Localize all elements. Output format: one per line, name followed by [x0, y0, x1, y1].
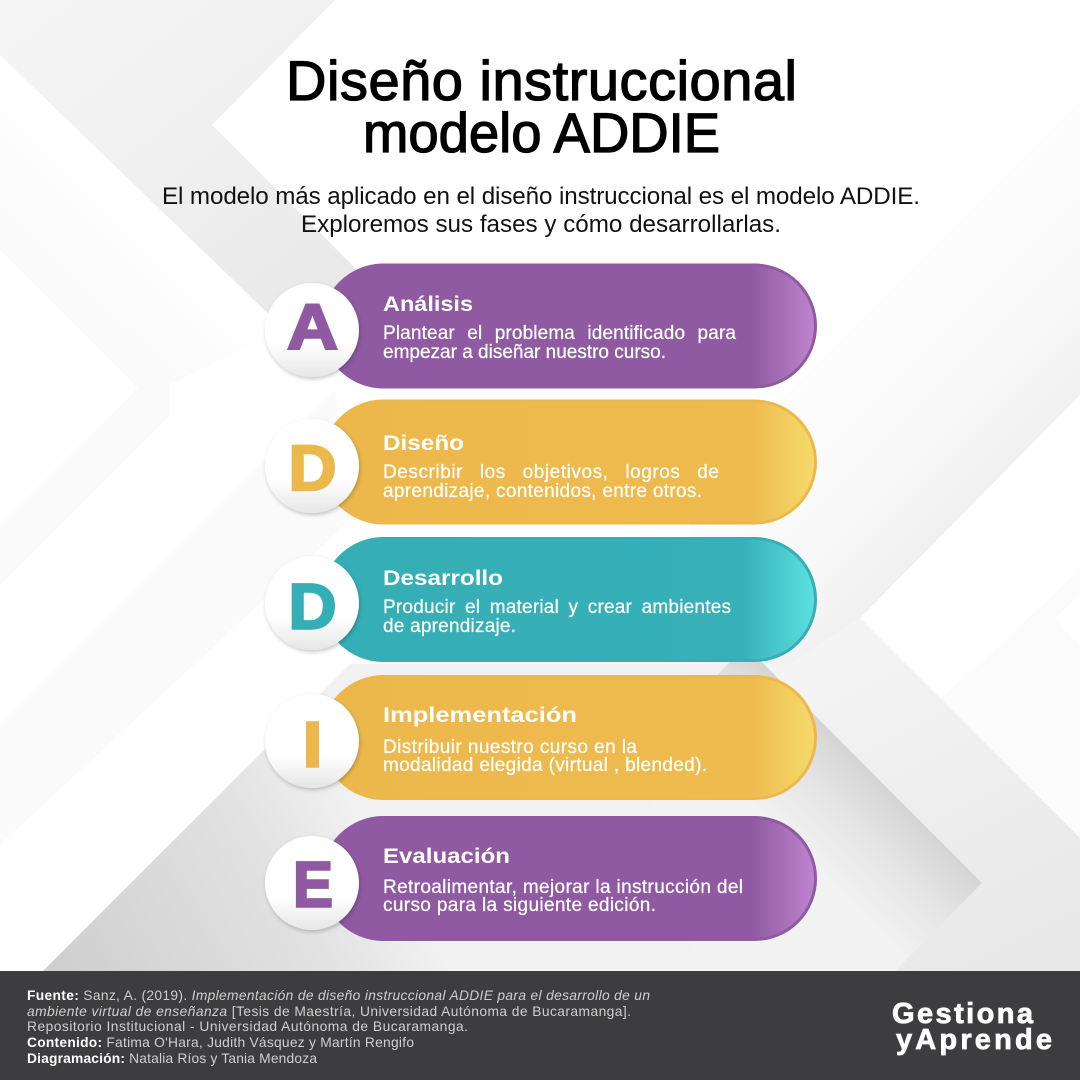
badge: letter E	[265, 836, 359, 930]
badge: letter E: E	[293, 848, 333, 920]
heading: Diseño: Diseño	[383, 431, 464, 455]
pill: Diseño	[322, 401, 816, 523]
description: Análisis	[383, 323, 736, 363]
badge: letter D	[265, 419, 359, 513]
title: modelo ADDIE	[363, 101, 720, 164]
description: Evaluación: curso para la siguiente edición.	[383, 895, 656, 916]
description: Diseño: Describir los objetivos, logros de	[383, 462, 719, 483]
badge: letter D: D	[288, 570, 336, 642]
subtitle	[162, 183, 920, 238]
heading: Análisis: Análisis	[383, 292, 473, 316]
step I: Implementación	[265, 676, 816, 798]
badge: letter I	[265, 694, 359, 788]
heading: Desarrollo: Desarrollo	[383, 566, 503, 590]
credits text: Contenido: Fatima O'Hara, Judith Vásquez y Martín Rengifo	[27, 1035, 414, 1050]
pill: Análisis	[322, 265, 816, 387]
badge: letter I: I	[302, 708, 322, 780]
description: Desarrollo: Producir el material y crear ambientes	[383, 597, 731, 618]
heading: Evaluación: Evaluación	[383, 844, 510, 868]
description: Implementación: modalidad elegida (virtual , blended).	[383, 755, 707, 776]
title	[286, 49, 797, 164]
logo: Gestiona y Aprende	[892, 998, 1052, 1056]
description: Desarrollo: de aprendizaje.	[383, 616, 516, 637]
title: Diseño instruccional	[286, 49, 797, 112]
credits text: Fuente: Sanz, A. (2019). Implementación de diseño instruccional ADDIE para el desarrollo de un	[27, 988, 650, 1003]
description: Implementación	[383, 737, 707, 776]
credits text: ambiente virtual de enseñanza [Tesis de Maestría, Universidad Autónoma de Bucaramanga].	[27, 1004, 631, 1019]
credits text: Diagramación: Natalia Ríos y Tania Mendoza	[27, 1051, 317, 1066]
step E: Evaluación	[265, 818, 816, 940]
logo: Gestiona y Aprende: Gestiona	[892, 998, 1034, 1030]
description: Desarrollo	[383, 597, 731, 637]
description: Diseño	[383, 462, 719, 502]
description: Análisis: empezar a diseñar nuestro curso.	[383, 342, 666, 363]
heading: Implementación: Implementación	[383, 703, 577, 727]
badge: letter A	[265, 283, 359, 377]
step D: Desarrollo	[265, 538, 816, 660]
description: Análisis: Plantear el problema identificado para	[383, 323, 736, 344]
logo: Gestiona y Aprende: yAprende	[896, 1024, 1052, 1056]
step A: Análisis	[265, 265, 816, 387]
badge: letter D	[265, 556, 359, 650]
pill: Implementación	[322, 676, 816, 798]
description: Diseño: aprendizaje, contenidos, entre otros.	[383, 481, 702, 502]
credits text	[27, 988, 650, 1066]
description: Evaluación: Retroalimentar, mejorar la instrucción del	[383, 877, 743, 898]
credits text: Repositorio Institucional - Universidad Autónoma de Bucaramanga.	[27, 1019, 468, 1034]
description: Implementación: Distribuir nuestro curso en la	[383, 737, 637, 758]
pill: Desarrollo	[322, 538, 816, 660]
badge: letter A: A	[287, 291, 338, 363]
subtitle: El modelo más aplicado en el diseño instruccional es el modelo ADDIE.	[162, 183, 920, 210]
badge: letter D: D	[288, 432, 336, 504]
description: Evaluación	[383, 877, 743, 916]
pill: Evaluación	[322, 818, 816, 940]
footer bar	[0, 971, 1080, 1080]
subtitle: Exploremos sus fases y cómo desarrollarlas.	[301, 211, 781, 238]
step D: Diseño	[265, 401, 816, 523]
